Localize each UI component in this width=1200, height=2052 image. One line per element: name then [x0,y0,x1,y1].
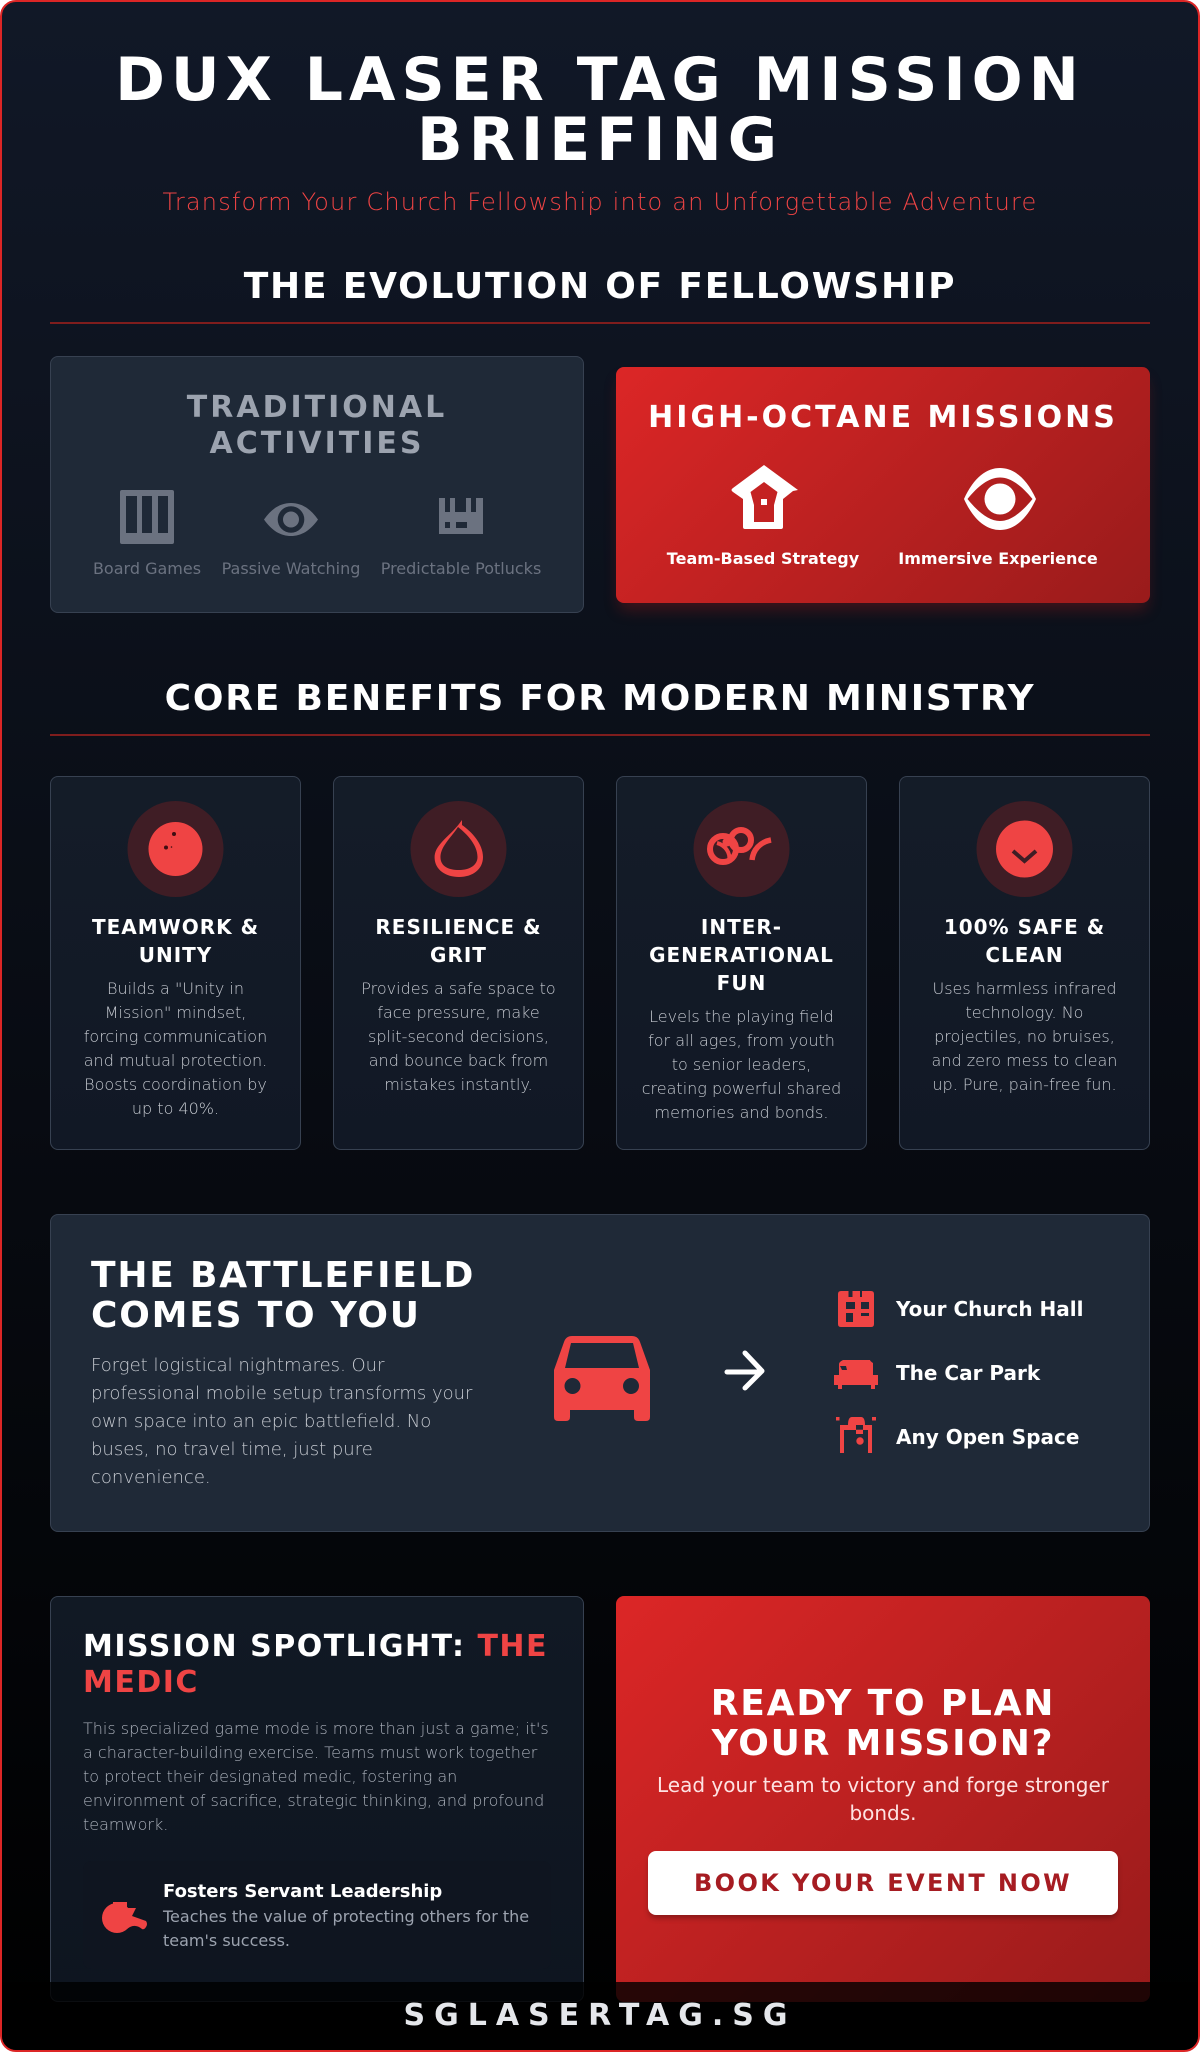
text: spotlight: environment of sacrifice, strategic thinking, and profound [83,1791,544,1810]
callout text [162,1907,529,1950]
icon: safe [976,801,1072,897]
card heading: TEAMWORK & [92,915,259,939]
panel: high-octane missions [616,367,1150,603]
text: battlefield: buses, no travel time, just pure [91,1439,373,1460]
icon: passive watching [264,503,318,536]
panel: mission spotlight [50,1596,584,2002]
label: team-based strategy: Team-Based Strategy [667,549,859,568]
card text: Boosts coordination by [84,1075,267,1094]
panel: call to action [616,1596,1150,2002]
card text: technology. No [966,1003,1083,1022]
text: call to action: Lead your team to victory and forge stronger [657,1773,1109,1797]
heading: mission spotlight [83,1629,548,1700]
card: safe and clean [899,776,1150,1150]
icon: car park [834,1360,878,1389]
card text [642,1007,841,1122]
callout title: Fosters Servant Leadership [163,1881,442,1902]
card heading: CLEAN [985,943,1064,967]
card text: for all ages, from youth [648,1031,835,1050]
card text: up. Pure, pain-free fun. [932,1075,1117,1094]
footer [2,1982,1198,2050]
label: immersive experience: Immersive Experience [898,549,1098,568]
title [115,45,1085,175]
text: battlefield: convenience. [91,1467,211,1488]
icon: church hall [838,1291,874,1327]
panel: the battlefield comes to you [50,1214,1150,1532]
icon: medic [102,1902,147,1933]
button: book your event [648,1851,1118,1915]
heading: mission spotlight: MEDIC [83,1665,199,1700]
text: spotlight: a character-building exercise. Teams must work together [83,1743,537,1762]
card text: forcing communication [84,1027,267,1046]
icon: resilience [410,801,506,897]
heading: ready to plan: YOUR MISSION? [712,1723,1054,1764]
label: board games: Board Games [93,559,201,578]
card text: Builds a "Unity in [107,979,244,998]
card text: to senior leaders, [672,1055,811,1074]
card text: split-second decisions, [368,1027,549,1046]
card text [361,979,556,1094]
card heading [92,915,259,967]
card text: up to 40%. [132,1099,219,1118]
callout text: Teaches the value of protecting others for the [163,1907,529,1926]
heading: battlefield [91,1255,475,1336]
icon: team-based strategy [732,465,798,529]
footer: SGLASERTAG.SG [403,1998,797,2033]
callout: servant leadership [83,1861,551,1969]
card: resilience and grit [333,776,584,1150]
label: car park: The Car Park [896,1361,1040,1385]
card heading [649,915,834,995]
button: book your event: BOOK YOUR EVENT NOW [694,1869,1072,1897]
text: spotlight: to protect their designated medic, fostering an [83,1767,457,1786]
card text [932,979,1117,1094]
card heading [375,915,542,967]
card text: memories and bonds. [655,1103,828,1122]
title: BRIEFING [417,105,783,175]
card text: and mutual protection. [84,1051,267,1070]
card text: and zero mess to clean [932,1051,1117,1070]
card: teamwork and unity [50,776,301,1150]
heading: ready to plan: READY TO PLAN [711,1683,1055,1724]
heading: battlefield: THE BATTLEFIELD [91,1255,475,1296]
arrow [724,1350,764,1390]
card heading: RESILIENCE & [375,915,542,939]
heading: mission spotlight: MISSION SPOTLIGHT: THE [83,1629,548,1664]
text: battlefield: own space into an epic battlefield. No [91,1411,431,1432]
text: battlefield: Forget logistical nightmares. Our [91,1355,384,1376]
icon: board games [120,490,174,544]
text: battlefield: professional mobile setup transforms your [91,1383,472,1404]
card heading: FUN [717,971,766,995]
card text: Mission" mindset, [105,1003,246,1022]
icon: immersive experience [964,468,1036,530]
subtitle: Transform Your Church Fellowship into an Unforgettable Adventure [162,188,1038,216]
text: spotlight [83,1719,549,1834]
card: inter-generational fun [616,776,867,1150]
label: predictable potlucks: Predictable Potlucks [381,559,541,578]
icon: inter-generational [694,801,790,897]
text: spotlight: This specialized game mode is more than just a game; it's [83,1719,549,1738]
card text: projectiles, no bruises, [934,1027,1115,1046]
heading: core benefits: CORE BENEFITS FOR MODERN MINISTRY [165,678,1035,719]
heading: traditional activities [186,390,447,461]
icon: teamwork [128,801,224,897]
card heading: INTER- [701,915,782,939]
label: church hall: Your Church Hall [896,1297,1083,1321]
title: DUX LASER TAG MISSION [115,45,1085,115]
card text: face pressure, make [377,1003,540,1022]
text: spotlight: teamwork. [83,1815,168,1834]
card text: Provides a safe space to [361,979,556,998]
text: battlefield [91,1355,472,1488]
card text: and bounce back from [369,1051,548,1070]
callout text: team's success. [163,1931,290,1950]
card text: Levels the playing field [649,1007,834,1026]
card text [84,979,267,1118]
icon: car [554,1336,650,1421]
heading: high-octane missions: HIGH-OCTANE MISSIONS [648,400,1118,435]
card text: creating powerful shared [642,1079,841,1098]
card text: Uses harmless infrared [932,979,1116,998]
icon: predictable potlucks [439,498,483,534]
card heading: 100% SAFE & [944,915,1105,939]
heading: ready to plan [711,1683,1055,1764]
heading: evolution of fellowship: THE EVOLUTION OF FELLOWSHIP [244,266,956,307]
card heading: UNITY [139,943,212,967]
panel: traditional activities [50,356,584,613]
heading: traditional activities: TRADITIONAL [187,390,447,425]
heading: battlefield: COMES TO YOU [91,1295,421,1336]
card heading: GENERATIONAL [649,943,834,967]
text: call to action: bonds. [849,1801,917,1825]
heading: traditional activities: ACTIVITIES [210,426,424,461]
text: call to action [657,1773,1109,1825]
icon: open space [836,1417,876,1453]
card heading [944,915,1105,967]
card text: mistakes instantly. [384,1075,533,1094]
label: passive watching: Passive Watching [222,559,360,578]
label: open space: Any Open Space [896,1425,1079,1449]
card heading: GRIT [430,943,487,967]
